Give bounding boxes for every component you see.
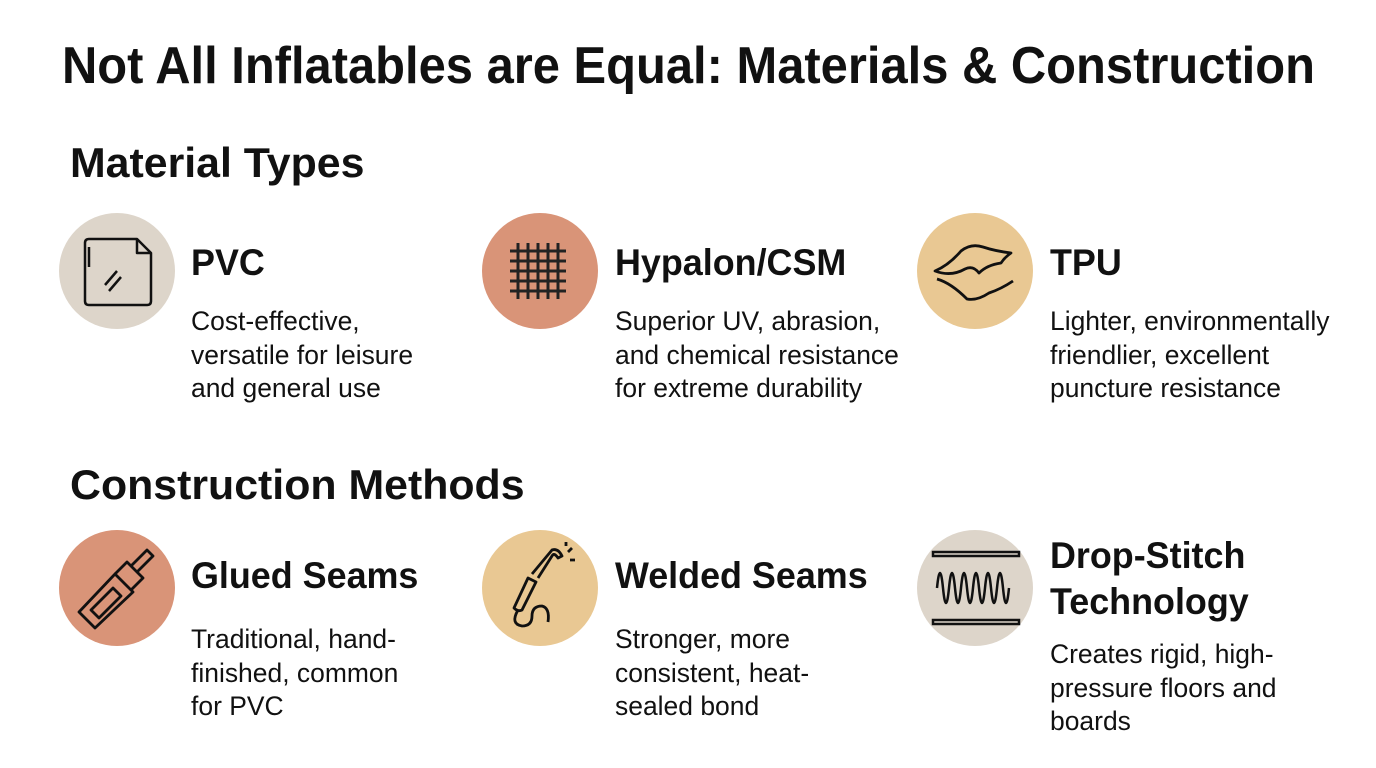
heading: drop-stitch: Technology: [1050, 581, 1249, 622]
icon: PVC sheet: [59, 213, 175, 329]
text: glued: for PVC: [191, 691, 284, 721]
text: PVC: [191, 306, 413, 403]
text: welded: Stronger, more: [615, 624, 790, 654]
text: PVC: and general use: [191, 373, 381, 403]
heading: material types: Material Types: [70, 139, 364, 186]
text: TPU: [1050, 306, 1330, 403]
heading: PVC: PVC: [191, 242, 265, 283]
text: welded: [615, 624, 809, 721]
heading: construction methods: Construction Methods: [70, 461, 525, 508]
icon: drop stitch: [917, 530, 1033, 646]
text: drop-stitch: Creates rigid, high-: [1050, 639, 1274, 669]
text: welded: sealed bond: [615, 691, 759, 721]
text: TPU: puncture resistance: [1050, 373, 1281, 403]
text: Hypalon: [615, 306, 899, 403]
text: Hypalon: for extreme durability: [615, 373, 862, 403]
text: drop-stitch: boards: [1050, 706, 1131, 736]
text: welded: consistent, heat-: [615, 658, 809, 688]
text: Hypalon: and chemical resistance: [615, 340, 899, 370]
title: Not All Inflatables are Equal: Materials & Construction: [62, 37, 1315, 95]
text: glued: finished, common: [191, 658, 398, 688]
icon: glue tube: [59, 530, 175, 646]
heading: TPU: TPU: [1050, 242, 1122, 283]
text: TPU: friendlier, excellent: [1050, 340, 1269, 370]
icon: woven fabric: [482, 213, 598, 329]
heading: welded seams: Welded Seams: [615, 555, 868, 596]
text: drop-stitch: pressure floors and: [1050, 672, 1277, 702]
text: PVC: versatile for leisure: [191, 340, 413, 370]
text: glued: [191, 624, 398, 721]
heading: Hypalon: Hypalon/CSM: [615, 242, 846, 283]
heading: drop-stitch: [1050, 535, 1249, 622]
text: drop-stitch: [1050, 639, 1277, 736]
icon: welder: [482, 530, 598, 646]
heading: glued seams: Glued Seams: [191, 555, 418, 596]
icon: TPU layers: [917, 213, 1033, 329]
text: Hypalon: Superior UV, abrasion,: [615, 306, 880, 336]
text: TPU: Lighter, environmentally: [1050, 306, 1329, 336]
text: PVC: Cost-effective,: [191, 306, 360, 336]
text: glued: Traditional, hand-: [191, 624, 396, 654]
heading: drop-stitch: Drop-Stitch: [1050, 535, 1245, 576]
